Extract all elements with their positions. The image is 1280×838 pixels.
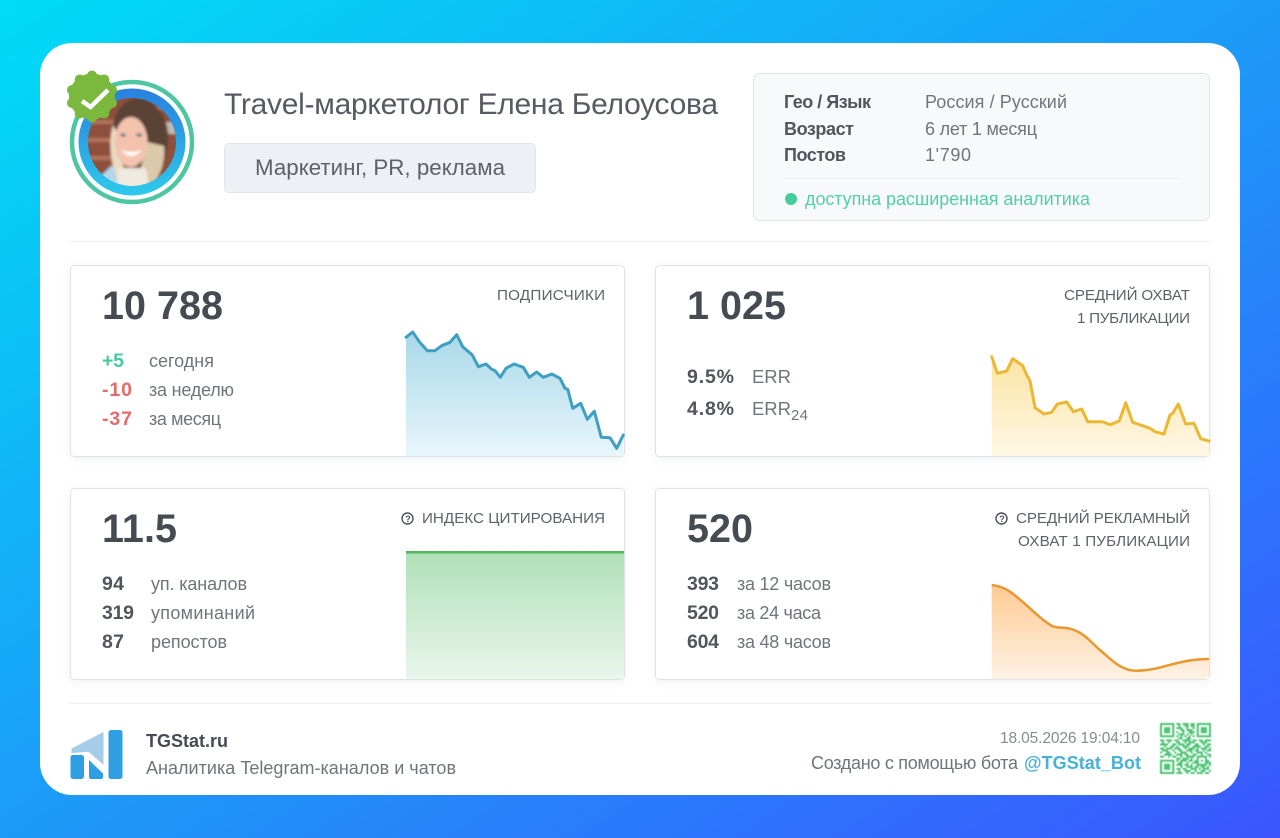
posts row: Постов (784, 145, 846, 165)
subscriber changes: -37 (102, 408, 132, 430)
posts row: 1'790 (925, 145, 971, 165)
timestamp: 18.05.2026 19:04:10 (1000, 730, 1140, 747)
ad reach label: ОХВАТ 1 ПУБЛИКАЦИИ (1018, 533, 1190, 550)
ERR metrics: 24 (791, 407, 808, 424)
subscriber changes: -10 (102, 379, 132, 401)
icon: QR code (1160, 723, 1211, 774)
icon: TGStat logo (70, 730, 122, 779)
ERR metrics: 4.8% (687, 398, 734, 420)
ad reach stats (687, 573, 831, 653)
reach label: СРЕДНИЙ ОХВАТ (1064, 286, 1190, 304)
citation value: 11.5 (102, 507, 177, 551)
citation stats: 87 (102, 631, 124, 653)
citation label: ИНДЕКС ЦИТИРОВАНИЯ (422, 510, 605, 527)
panel: citation index (70, 488, 624, 680)
icon: help: ? (405, 514, 411, 524)
age row: 6 лет 1 месяц (925, 119, 1037, 139)
icon: help (996, 513, 1007, 524)
ad reach label: СРЕДНИЙ РЕКЛАМНЫЙ (1016, 509, 1190, 527)
avatar with verified badge (67, 70, 192, 202)
footer brand (146, 731, 456, 778)
category pill (224, 144, 536, 192)
bot credit: Создано с помощью бота (811, 753, 1019, 773)
subscribers label: ПОДПИСЧИКИ (497, 287, 605, 304)
ad reach stats: за 12 часов (737, 574, 831, 594)
bot credit: @TGStat_Bot (1024, 753, 1141, 773)
ad reach stats: 520 (687, 602, 719, 624)
ERR metrics: 9.5% (687, 366, 734, 388)
subscriber changes: сегодня (149, 351, 214, 371)
ad reach stats: за 48 часов (737, 632, 831, 652)
panel: channel info (754, 74, 1210, 220)
ERR metrics (687, 366, 808, 424)
photo portrait (88, 98, 176, 186)
age row (784, 119, 1037, 139)
footer brand: TGStat.ru (146, 731, 228, 751)
ad reach label (1016, 509, 1190, 550)
reach label (1064, 286, 1190, 327)
geo row: Гео / Язык (784, 92, 872, 112)
citation stats: упоминаний (151, 603, 255, 623)
extended analytics status: доступна расширенная аналитика (805, 189, 1091, 209)
citation stats (102, 573, 255, 653)
geo row (784, 92, 1067, 112)
icon: help (402, 513, 413, 524)
reach value: 1 025 (687, 284, 786, 328)
citation stats: 319 (102, 602, 134, 624)
icon: help: ? (999, 514, 1005, 524)
bot credit (811, 753, 1141, 773)
channel title: Travel-маркетолог Елена Белоусова (224, 88, 718, 121)
citation stats: 94 (102, 573, 124, 595)
subscriber changes (102, 350, 234, 430)
subscriber changes: за неделю (149, 380, 234, 400)
age row: Возраст (784, 119, 854, 139)
area chart: citation (406, 551, 624, 679)
area chart: reach (992, 357, 1209, 456)
area chart: ad reach (992, 585, 1209, 679)
subscriber changes: +5 (102, 350, 124, 372)
area chart: subscribers (406, 332, 623, 456)
posts row (784, 145, 971, 165)
ad reach stats: 604 (687, 631, 719, 653)
citation stats: уп. каналов (151, 574, 247, 594)
category pill: Маркетинг, PR, реклама (255, 155, 506, 180)
ad reach stats: за 24 часа (737, 603, 822, 623)
panel: subscribers (70, 266, 624, 456)
footer brand: Аналитика Telegram-каналов и чатов (146, 758, 456, 778)
icon: verified badge (67, 70, 117, 122)
ad reach value: 520 (687, 507, 753, 551)
panel: average reach (656, 266, 1210, 456)
subscribers value: 10 788 (102, 284, 223, 328)
geo row: Россия / Русский (925, 92, 1067, 112)
ad reach stats: 393 (687, 573, 719, 595)
citation stats: репостов (151, 632, 227, 652)
panel: average ad reach (656, 488, 1210, 680)
ERR metrics: ERR (752, 366, 791, 387)
reach label: 1 ПУБЛИКАЦИИ (1077, 310, 1190, 327)
ERR metrics: ERR (752, 398, 791, 419)
subscriber changes: за месяц (149, 409, 221, 429)
